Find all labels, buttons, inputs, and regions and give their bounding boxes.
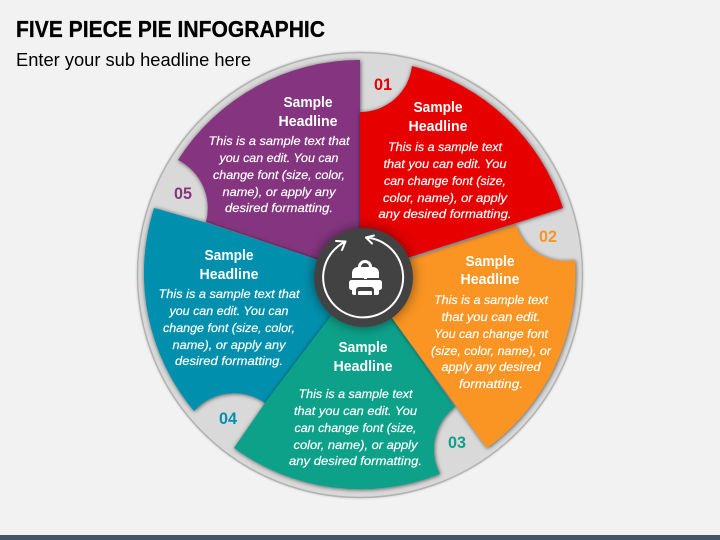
body text 01: color, name), or apply bbox=[383, 191, 508, 205]
body text 01: any desired formatting. bbox=[378, 207, 512, 221]
number 03: 03 bbox=[448, 434, 466, 452]
body text 05: This is a sample text that bbox=[208, 134, 350, 148]
body text 05: change font (size, color, bbox=[213, 168, 345, 182]
wedge 05 bbox=[178, 60, 363, 275]
panel: 03 green bbox=[234, 277, 466, 489]
subtitle: Enter your sub headline here bbox=[16, 49, 251, 70]
title: FIVE PIECE PIE INFOGRAPHIC bbox=[16, 16, 325, 42]
headline 05: Sample bbox=[284, 95, 332, 111]
number 04: 04 bbox=[219, 410, 238, 428]
body text 05 bbox=[208, 134, 350, 215]
hub circle bbox=[314, 228, 413, 327]
headline 01: Sample bbox=[414, 100, 462, 116]
body text 05: name), or apply any bbox=[222, 185, 336, 199]
panel: 05 purple bbox=[174, 60, 363, 275]
panel: 01 red bbox=[360, 66, 563, 275]
wedge 03 bbox=[234, 277, 455, 489]
body text 05: desired formatting. bbox=[225, 201, 333, 215]
headline 04: Sample bbox=[204, 248, 254, 264]
headline 04: Headline bbox=[200, 267, 258, 283]
wedge 01 bbox=[360, 66, 563, 275]
headline 01: Headline bbox=[408, 119, 468, 135]
body text 04: desired formatting. bbox=[175, 354, 283, 368]
headline 03: Sample bbox=[338, 340, 388, 356]
headline 01 bbox=[408, 100, 468, 135]
body text 04: you can edit. You can bbox=[168, 304, 289, 318]
body text 02: formatting. bbox=[459, 377, 523, 391]
headline 05 bbox=[278, 95, 338, 130]
headline 03 bbox=[334, 340, 392, 375]
body text 04: name), or apply any bbox=[172, 338, 286, 352]
body text 03: color, name), or apply bbox=[294, 438, 418, 452]
body text 03: that you can edit. You bbox=[294, 404, 417, 418]
number 01: 01 bbox=[374, 76, 392, 94]
body text 01: can change font (size, bbox=[384, 174, 506, 188]
panel: 04 blue bbox=[144, 208, 363, 428]
body text 02: apply any desired bbox=[442, 360, 542, 374]
body text 03: can change font (size, bbox=[294, 421, 416, 435]
body text 04: This is a sample text that bbox=[158, 287, 300, 301]
circular arrows bbox=[323, 236, 403, 317]
wedge 04 bbox=[144, 208, 363, 411]
body text 02: You can change font bbox=[434, 327, 549, 341]
panel: 02 orange bbox=[363, 225, 575, 448]
headline 02 bbox=[460, 254, 520, 288]
center hub bbox=[314, 228, 413, 327]
number 05: 05 bbox=[174, 185, 192, 203]
body text 02: that you can edit. bbox=[442, 310, 540, 324]
body text 04: change font (size, color, bbox=[163, 321, 295, 335]
body text 02: (size, color, name), or bbox=[431, 344, 552, 358]
headline 02: Headline bbox=[460, 272, 520, 288]
body text 03: any desired formatting. bbox=[289, 454, 422, 468]
icon: backpack bbox=[349, 260, 382, 295]
bottom bar bbox=[0, 535, 720, 540]
body text 01 bbox=[378, 140, 512, 221]
body text 03 bbox=[289, 387, 422, 468]
body text 05: you can edit. You can bbox=[218, 151, 339, 165]
headline 05: Headline bbox=[278, 114, 338, 130]
body text 03: This is a sample text bbox=[298, 387, 413, 401]
body text 02: This is a sample text bbox=[434, 293, 549, 307]
body text 04 bbox=[158, 287, 300, 368]
body text 02 bbox=[431, 293, 552, 391]
wedge 02 bbox=[363, 225, 575, 448]
headline 04 bbox=[200, 248, 258, 283]
number 02: 02 bbox=[539, 228, 557, 246]
headline 03: Headline bbox=[334, 359, 392, 375]
body text 01: This is a sample text bbox=[388, 140, 503, 154]
outer disc bbox=[138, 52, 582, 498]
headline 02: Sample bbox=[466, 254, 514, 270]
body text 01: that you can edit. You bbox=[384, 157, 507, 171]
